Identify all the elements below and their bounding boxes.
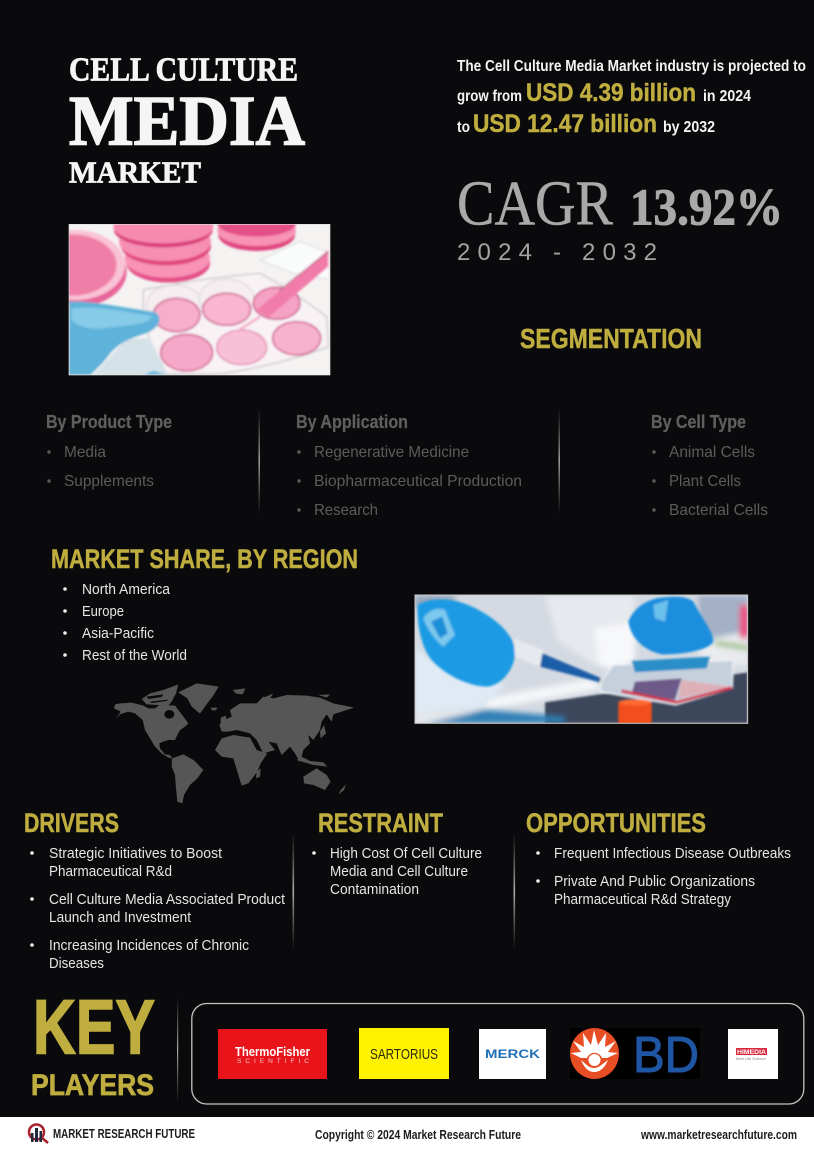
opportunities list bbox=[536, 845, 791, 908]
drivers list bbox=[30, 845, 286, 972]
CAGR figure: CAGR bbox=[457, 168, 613, 238]
CAGR figure: 2024 - 2032 bbox=[457, 239, 657, 266]
CAGR figure: 13.92% bbox=[630, 180, 783, 236]
restraint list: High Cost Of Cell Culture bbox=[330, 845, 482, 862]
segment column: by application: By Application bbox=[296, 411, 408, 432]
heading: market share by region: MARKET SHARE, BY REGION bbox=[51, 544, 358, 574]
logo: Thermo Fisher Scientific bbox=[218, 1029, 327, 1079]
logo: HiMedia: HIMEDIA bbox=[737, 1050, 767, 1056]
opportunities list: Private And Public Organizations bbox=[554, 873, 755, 890]
photo: petri dishes with pink culture media bbox=[68, 224, 330, 376]
heading: key players: KEY bbox=[33, 984, 155, 1070]
drivers list: Pharmaceutical R&d bbox=[49, 863, 172, 880]
footer logo: Market Research Future: MARKET RESEARCH FUTURE bbox=[53, 1127, 195, 1141]
restraint list: Contamination bbox=[330, 881, 419, 898]
segment column: by application: Research bbox=[314, 502, 378, 519]
region list bbox=[63, 581, 187, 664]
logo: BD bbox=[570, 1026, 700, 1083]
segment column: by cell type: Plant Cells bbox=[669, 473, 741, 490]
segment column: by cell type: Animal Cells bbox=[669, 444, 755, 461]
footer bar: Copyright © 2024 Market Research Future bbox=[315, 1128, 521, 1142]
footer bar bbox=[0, 1117, 814, 1150]
drivers list: Diseases bbox=[49, 955, 104, 972]
segment column: by cell type bbox=[651, 411, 768, 519]
segment column: by application: Regenerative Medicine bbox=[314, 444, 469, 461]
logo: Sartorius: SARTORIUS bbox=[370, 1046, 438, 1063]
logo: Thermo Fisher Scientific: SCIENTIFIC bbox=[237, 1058, 309, 1065]
logo: BD: BD bbox=[633, 1026, 699, 1083]
region list: Rest of the World bbox=[82, 647, 187, 664]
market projection text: by 2032 bbox=[663, 119, 715, 136]
drivers list: Launch and Investment bbox=[49, 909, 192, 926]
opportunities list: Frequent Infectious Disease Outbreaks bbox=[554, 845, 791, 862]
heading: key players bbox=[31, 984, 155, 1102]
heading: drivers: DRIVERS bbox=[24, 808, 119, 838]
logo: Merck bbox=[479, 1029, 546, 1079]
segment column: by product type bbox=[46, 411, 172, 490]
logo: Sartorius bbox=[359, 1028, 449, 1079]
logo: HiMedia: Best Life Science bbox=[736, 1056, 767, 1061]
region list: North America bbox=[82, 581, 171, 598]
title bbox=[69, 52, 305, 190]
title: MEDIA bbox=[69, 82, 305, 160]
segment column: by cell type: By Cell Type bbox=[651, 411, 746, 432]
heading: restraint: RESTRAINT bbox=[318, 808, 443, 838]
key players logo panel bbox=[192, 1004, 804, 1104]
title: CELL CULTURE bbox=[69, 52, 298, 88]
logo: Merck: MERCK bbox=[485, 1047, 540, 1061]
heading: key players: PLAYERS bbox=[31, 1069, 154, 1102]
market projection text: grow from bbox=[457, 88, 522, 105]
logo: HiMedia bbox=[728, 1029, 778, 1079]
footer logo: Market Research Future bbox=[29, 1124, 195, 1143]
heading: opportunities: OPPORTUNITIES bbox=[526, 808, 706, 838]
world map bbox=[114, 683, 354, 803]
logo: Thermo Fisher Scientific: ThermoFisher bbox=[235, 1045, 310, 1059]
market projection text bbox=[457, 58, 806, 138]
restraint list bbox=[312, 845, 482, 898]
drivers list: Increasing Incidences of Chronic bbox=[49, 937, 249, 954]
heading: segmentation: SEGMENTATION bbox=[520, 323, 702, 354]
market projection text: USD 4.39 billion bbox=[526, 79, 696, 107]
segment column: by cell type: Bacterial Cells bbox=[669, 502, 768, 519]
region list: Europe bbox=[82, 603, 124, 620]
opportunities list: Pharmaceutical R&d Strategy bbox=[554, 891, 731, 908]
market projection text: USD 12.47 billion bbox=[473, 110, 657, 138]
segment column: by product type: Media bbox=[64, 444, 106, 461]
title: MARKET bbox=[69, 154, 201, 190]
segment column: by product type: Supplements bbox=[64, 473, 154, 490]
restraint list: Media and Cell Culture bbox=[330, 863, 468, 880]
drivers list: Cell Culture Media Associated Product bbox=[49, 891, 286, 908]
market projection text: in 2024 bbox=[703, 88, 751, 105]
drivers list: Strategic Initiatives to Boost bbox=[49, 845, 223, 862]
region list: Asia-Pacific bbox=[82, 625, 154, 642]
photo: gloved hands pipetting into a culture flask bbox=[415, 595, 748, 725]
segment column: by application: Biopharmaceutical Production bbox=[314, 473, 522, 490]
segment column: by product type: By Product Type bbox=[46, 411, 172, 432]
market projection text: to bbox=[457, 119, 470, 136]
CAGR figure bbox=[457, 168, 783, 266]
segment column: by application bbox=[296, 411, 522, 519]
